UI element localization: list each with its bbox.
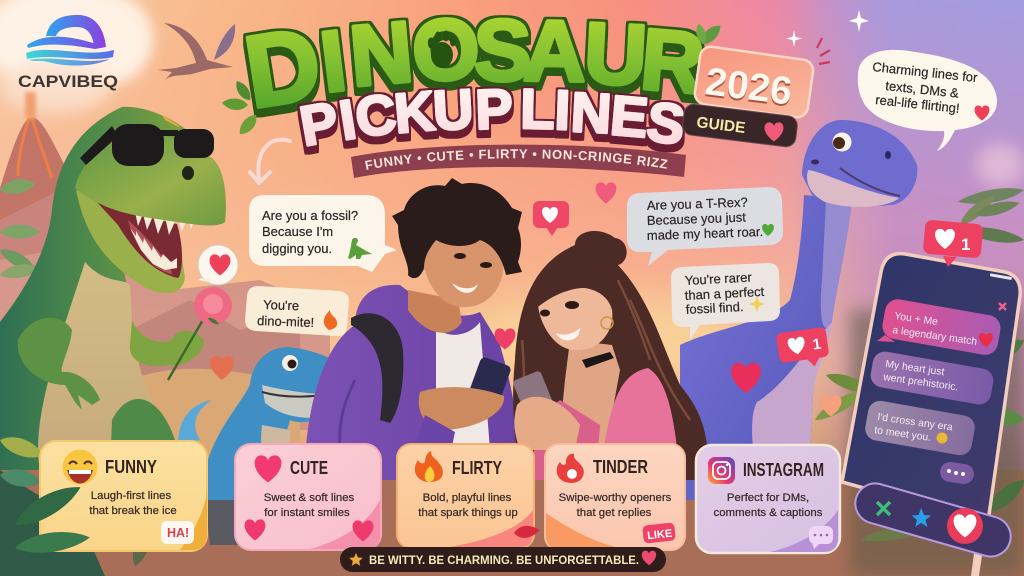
emoji: fire xyxy=(415,451,443,482)
message bubble 3: I'd cross any era xyxy=(877,412,953,434)
jungle foliage left xyxy=(0,176,42,281)
card: instagram: Perfect for DMs, xyxy=(727,492,809,504)
message bubble 2 xyxy=(869,350,995,406)
neck xyxy=(408,290,462,333)
title: dinosaur: D xyxy=(238,6,328,130)
card: funny: Laugh-first lines xyxy=(91,490,172,502)
card: cute: Sweet & soft lines xyxy=(264,492,355,504)
speech bubble: you're dino-mite xyxy=(245,286,349,336)
shirt xyxy=(436,322,490,450)
speech bubble: T-Rex: made my heart roar. xyxy=(647,224,763,243)
purple brachiosaurus xyxy=(680,120,917,500)
like tag: LIKE xyxy=(647,528,673,542)
ribbon subtitle: FUNNY • CUTE • FLIRTY • NON-CRINGE RIZZ xyxy=(365,149,668,170)
emoji: grin xyxy=(62,450,98,484)
blue dinosaur xyxy=(178,347,350,545)
card: tinder: TINDER xyxy=(593,457,648,477)
heart speech icon xyxy=(198,245,238,285)
cardigan xyxy=(598,368,680,480)
volcano and distant mountains xyxy=(0,92,330,480)
HA badge xyxy=(161,521,194,544)
typing dots xyxy=(939,461,975,485)
girl chest xyxy=(555,340,620,480)
message bubble 3: to meet you. xyxy=(874,425,932,444)
icon: tinder flame xyxy=(557,454,584,483)
T-rex leg xyxy=(110,399,175,470)
face xyxy=(420,228,503,307)
pterodactyl xyxy=(158,23,235,80)
card: funny: FUNNY xyxy=(105,457,157,477)
boy phone xyxy=(464,356,512,416)
speech bubble: T-Rex: Are you a T-Rex? xyxy=(647,194,748,213)
T-rex left arm xyxy=(18,318,100,410)
girl hand xyxy=(514,397,580,450)
speech bubble: rarer than a fossil: than a perfect xyxy=(684,284,765,303)
floating hearts and like badges xyxy=(495,182,831,393)
card: funny: that break the ice xyxy=(89,505,177,517)
card: cute: CUTE xyxy=(290,458,328,478)
close x xyxy=(999,303,1006,310)
bottom tagline pill xyxy=(340,547,666,572)
speech bubble: are you a fossil xyxy=(249,195,397,272)
girl hair xyxy=(513,231,708,480)
hoodie xyxy=(304,285,520,480)
girl with pink cardigan xyxy=(512,231,708,480)
speech bubble: charming lines: texts, DMs & xyxy=(885,78,960,101)
foliage bottom left xyxy=(0,432,156,576)
boy with purple hoodie xyxy=(304,178,522,480)
like badge above phone: 1 xyxy=(961,235,970,254)
faded heart xyxy=(210,356,234,380)
HA badge: HA! xyxy=(167,526,189,540)
icon: small dino xyxy=(348,238,372,259)
dots bubble xyxy=(809,526,833,549)
card: flirty xyxy=(397,444,540,548)
girl face xyxy=(538,288,612,350)
T-rex belly xyxy=(38,262,165,470)
speech bubble: you're dino-mite: You're xyxy=(263,297,299,313)
like badge above phone xyxy=(923,220,983,267)
card: instagram xyxy=(696,445,840,553)
speech bubble: charming lines: Charming lines for xyxy=(872,59,979,85)
card: cute: for instant smiles xyxy=(264,507,350,519)
message bubble 2: My heart just xyxy=(885,359,945,378)
badge: 2026 guide: GUIDE xyxy=(696,114,746,137)
paw print in O xyxy=(428,30,456,68)
speech bubble: T-Rex xyxy=(627,187,783,266)
message bubble 3 xyxy=(863,399,977,457)
phone lower edge xyxy=(971,515,988,576)
message bubble 2: went prehistoric. xyxy=(882,372,959,394)
logo: CAPVIBEQ xyxy=(18,15,118,91)
message bubble 1: You + Me xyxy=(894,311,939,328)
status bar xyxy=(990,273,1012,280)
speech bubble: are you a fossil: Are you a fossil? xyxy=(262,208,358,223)
jungle foliage right xyxy=(812,184,1024,576)
card: tinder: Swipe-worthy openers xyxy=(559,492,672,504)
title: dinosaur: INOSAUR xyxy=(316,1,708,112)
foliage over funny card xyxy=(10,478,91,557)
arrow curl xyxy=(250,140,290,183)
card: tinder: that get replies xyxy=(577,507,652,519)
T-rex mouth xyxy=(95,200,182,278)
card: instagram: comments & captions xyxy=(714,507,823,519)
backpack strap xyxy=(351,313,403,423)
speech bubble: are you a fossil: Because I'm xyxy=(262,224,333,239)
icon: instagram xyxy=(708,457,735,484)
speech bubble: rarer than a fossil xyxy=(671,263,780,340)
ear xyxy=(412,251,426,273)
badge: 2026 guide xyxy=(681,45,814,148)
logo: CAPVIBEQ: CAPVIBEQ xyxy=(18,72,118,91)
girl phone xyxy=(512,370,558,426)
card: funny xyxy=(40,441,207,551)
speech bubble: are you a fossil: digging you. xyxy=(262,241,332,256)
T-rex lower jaw xyxy=(76,190,185,293)
speech bubble: rarer than a fossil: You're rarer xyxy=(684,269,753,288)
card: tinder xyxy=(545,444,685,550)
phone action bar xyxy=(851,479,1015,561)
T-rex snout xyxy=(75,133,226,225)
bottom tagline pill: BE WITTY. BE CHARMING. BE UNFORGETTABLE. xyxy=(369,554,639,567)
speech bubble: you're dino-mite: dino-mite! xyxy=(257,313,314,330)
ground xyxy=(0,470,1024,576)
phone body xyxy=(842,254,1020,522)
card: cute xyxy=(235,444,381,550)
boy hand xyxy=(419,387,504,430)
sunglasses xyxy=(80,124,214,166)
hair xyxy=(392,178,522,278)
rose xyxy=(168,287,232,380)
badge: 2026 guide: 2026 xyxy=(703,60,794,114)
card: flirty: that spark things up xyxy=(418,507,518,519)
T-rex teeth xyxy=(135,212,197,235)
message bubble 1: a legendary match xyxy=(892,325,978,348)
card: flirty: FLIRTY xyxy=(452,458,502,478)
speech bubble: charming lines: real-life flirting! xyxy=(875,92,960,116)
T-rex body xyxy=(0,107,205,470)
title: pickup lines: PICKUPLINES xyxy=(295,77,688,158)
message bubble 1 xyxy=(877,297,1003,357)
floating hearts and like badges: 1 xyxy=(812,336,822,354)
leaves by title xyxy=(222,21,724,138)
speech bubble: charming lines xyxy=(858,50,997,151)
sparkles and decorative marks xyxy=(786,10,869,64)
card: flirty: Bold, playful lines xyxy=(423,492,512,504)
speech bubble: T-Rex: Because you just xyxy=(647,210,746,228)
card: instagram: INSTAGRAM xyxy=(743,460,824,480)
green T-rex with sunglasses and rose xyxy=(0,107,226,470)
T-rex right arm xyxy=(130,320,204,366)
phone mockup xyxy=(842,254,1020,576)
speech bubble: rarer than a fossil: fossil find. xyxy=(685,299,744,317)
